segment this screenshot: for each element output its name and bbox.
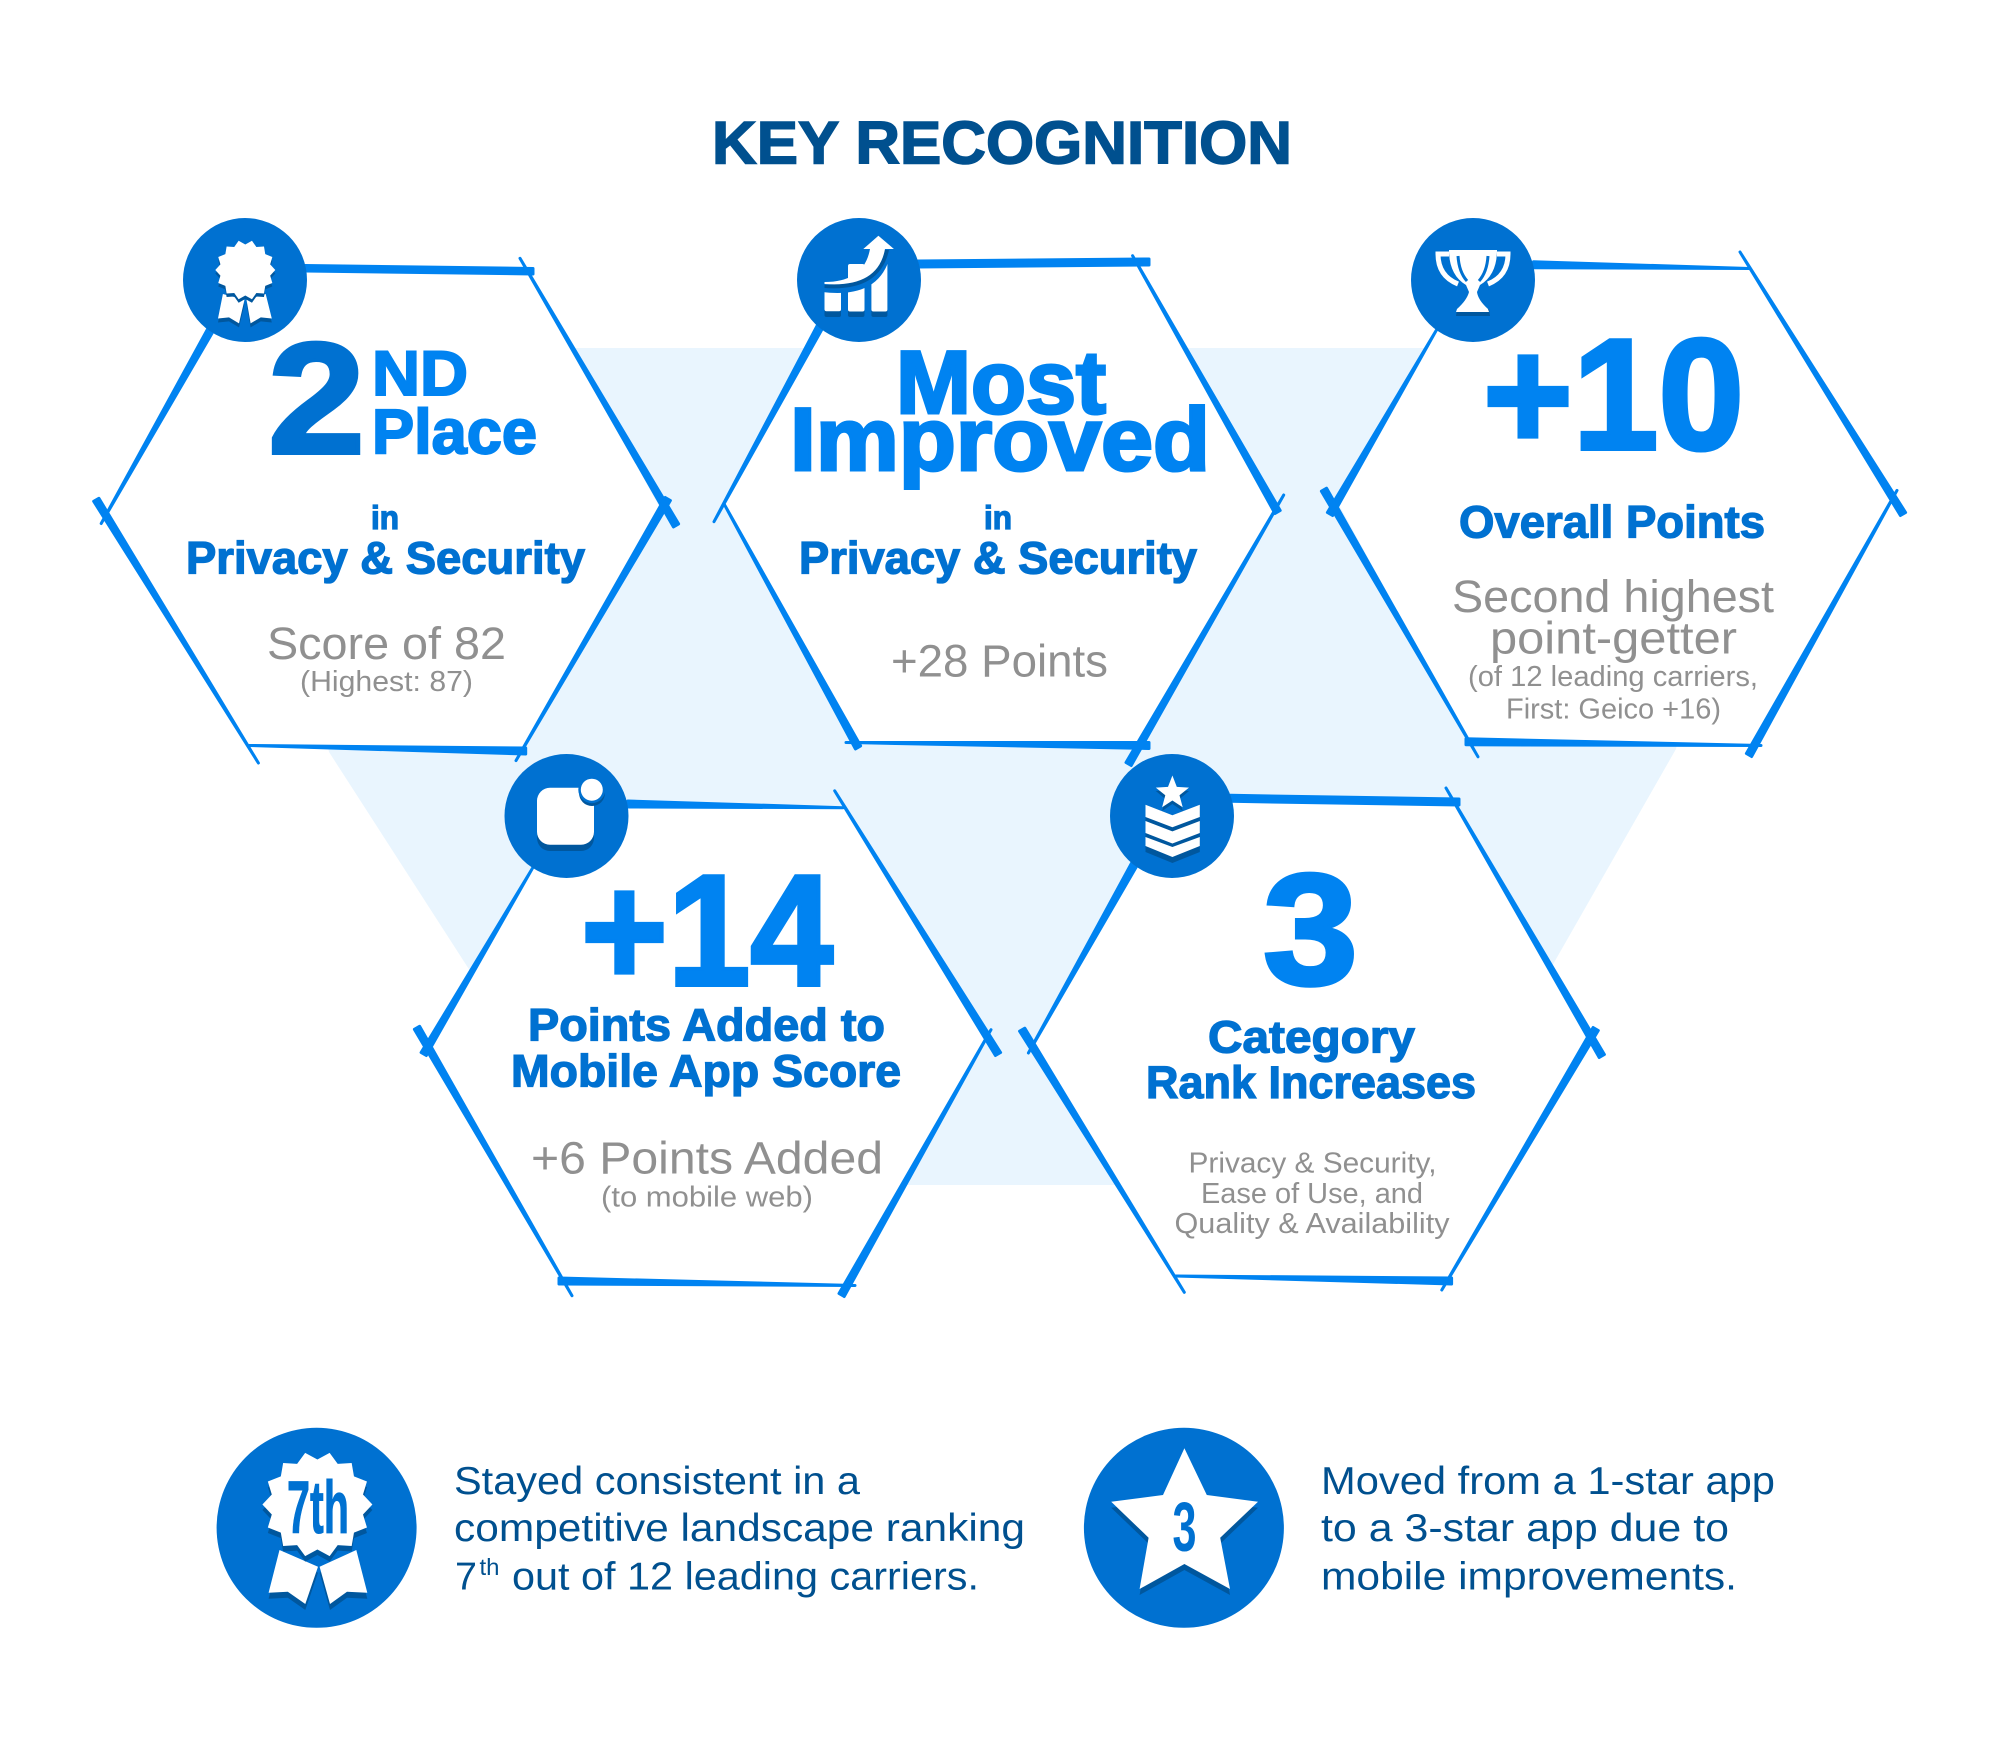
score text: Score of 82 [267, 618, 506, 669]
panel: most improved [714, 218, 1284, 766]
heading: Most Improved: Improved [790, 389, 1210, 489]
heading: in Privacy and Security: Privacy & Security [186, 533, 585, 584]
heading: in Privacy and Security [186, 499, 585, 584]
description text: Quality & Availability [1174, 1208, 1450, 1240]
text: ranking statement: 7 [455, 1556, 477, 1598]
description text: Ease of Use, and [1201, 1178, 1423, 1210]
big number: +10: +10 [1483, 307, 1744, 483]
description text: (to mobile web) [601, 1182, 813, 1214]
heading: Most Improved [790, 332, 1210, 489]
heading: Points Added to Mobile App Score: Points Added to [528, 1000, 885, 1050]
heading: in Privacy and Security: Privacy & Security [799, 533, 1197, 584]
hexagon outline [1020, 788, 1604, 1292]
background band [250, 348, 1750, 1185]
icon: star with 3: 3 [1172, 1488, 1196, 1566]
description text: Privacy & Security, [1188, 1148, 1436, 1180]
text: ranking statement [454, 1460, 1025, 1598]
heading: in Privacy and Security [799, 499, 1197, 584]
icon: 7th rosette: 7th [287, 1466, 349, 1549]
heading: in Privacy and Security: in [371, 499, 399, 536]
score text: (Highest: 87) [300, 666, 473, 698]
heading: Points Added to Mobile App Score: Mobile App Score [511, 1046, 901, 1096]
text: app rating statement: Moved from a 1-star app [1321, 1460, 1775, 1503]
hexagon outline [94, 258, 679, 763]
panel: 3 category rank increases [1020, 754, 1604, 1292]
text: app rating statement: to a 3-star app due to [1321, 1507, 1729, 1550]
hexagon outline [1321, 252, 1906, 757]
icon: rising bar chart [797, 218, 921, 342]
icon: rank chevrons and star [1110, 754, 1234, 878]
panel: +10 overall points [1321, 218, 1906, 757]
description text [1452, 571, 1775, 725]
text: ranking statement: Stayed consistent in a [454, 1460, 860, 1503]
heading: ND Place: Place [372, 398, 537, 468]
big number: 2: 2 [268, 311, 365, 487]
heading: Category Rank Increases [1146, 1012, 1476, 1108]
icon: rosette [183, 218, 307, 342]
text: app rating statement: mobile improvements. [1321, 1556, 1737, 1598]
description text: point-getter [1490, 612, 1737, 664]
description text: Second highest [1452, 571, 1775, 622]
heading: Points Added to Mobile App Score [511, 1000, 901, 1096]
callout: 7th ranking [217, 1428, 1025, 1628]
heading: Category Rank Increases: Rank Increases [1146, 1057, 1476, 1108]
heading: ND Place [372, 339, 537, 468]
points text: +28 Points [891, 636, 1108, 687]
description text [1174, 1148, 1450, 1240]
hexagon outline [714, 256, 1284, 765]
big number: 3: 3 [1263, 842, 1358, 1018]
description text [531, 1132, 883, 1214]
text: ranking statement: th [480, 1554, 500, 1580]
panel: +14 mobile app score [414, 754, 1001, 1296]
text: ranking statement: out of 12 leading carriers. [512, 1556, 979, 1598]
icon: mobile app [504, 754, 628, 878]
text: app rating statement [1321, 1460, 1775, 1598]
icon: trophy [1411, 218, 1535, 342]
heading: Most Improved: Most [896, 332, 1106, 432]
callout: star rating [1084, 1428, 1775, 1628]
heading: in Privacy and Security: in [984, 499, 1012, 536]
description text: First: Geico +16) [1506, 693, 1721, 725]
hexagon outline [414, 791, 1001, 1296]
icon: star with 3 [1084, 1428, 1284, 1628]
title: KEY RECOGNITION [712, 109, 1292, 176]
icon: 7th rosette [217, 1428, 417, 1628]
panel: 2nd place [94, 218, 679, 763]
heading: Overall Points: Overall Points [1459, 496, 1765, 548]
big number: +14: +14 [581, 843, 833, 1019]
score text [267, 618, 506, 698]
description text: +6 Points Added [531, 1132, 883, 1184]
heading: Category Rank Increases: Category [1208, 1012, 1415, 1062]
description text: (of 12 leading carriers, [1468, 661, 1758, 693]
heading: ND Place: ND [372, 339, 468, 409]
text: ranking statement: competitive landscape ranking [454, 1507, 1025, 1550]
